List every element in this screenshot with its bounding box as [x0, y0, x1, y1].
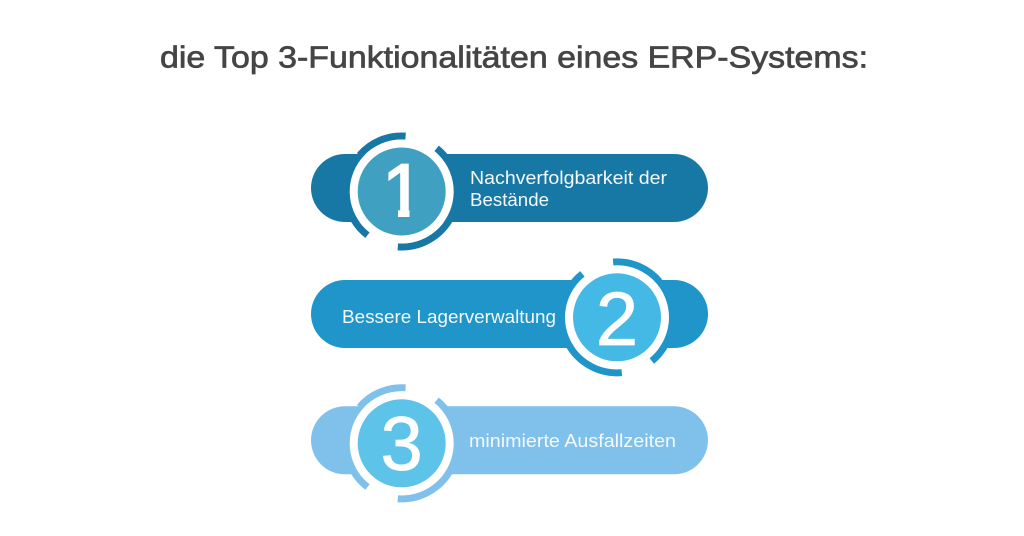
pill: item 2: [311, 280, 708, 348]
outer arcs: item 1: [354, 136, 457, 247]
label: item 2: Bessere Lagerverwaltung: [342, 306, 556, 327]
white ring: item 3: [350, 391, 454, 495]
number 2: 2: [596, 277, 638, 362]
panel: item 3: [311, 388, 708, 499]
label: item 1: Bestände: [470, 189, 549, 210]
outer arcs: item 2: [561, 262, 665, 373]
label: item 3: minimierte Ausfallzeiten: [469, 430, 676, 451]
white ring: item 2: [565, 265, 669, 369]
pill: item 1: [311, 154, 708, 222]
label: item 1: Nachverfolgbarkeit der: [470, 167, 667, 188]
pill: item 3: [311, 406, 708, 474]
number badge: item 1: [358, 148, 446, 236]
outer arcs: item 3: [354, 388, 457, 499]
number badge: item 2: [573, 273, 661, 361]
panel: item 2: [311, 262, 708, 373]
white ring: item 1: [350, 140, 454, 244]
number badge: item 3: [358, 399, 446, 487]
panel: item 1: [311, 136, 708, 247]
number 3: 3: [381, 402, 423, 487]
title: die Top 3-Funktionalitäten eines ERP-Systems:: [160, 40, 868, 74]
label: item 1: [470, 167, 667, 210]
number 1: 1: [382, 149, 424, 234]
